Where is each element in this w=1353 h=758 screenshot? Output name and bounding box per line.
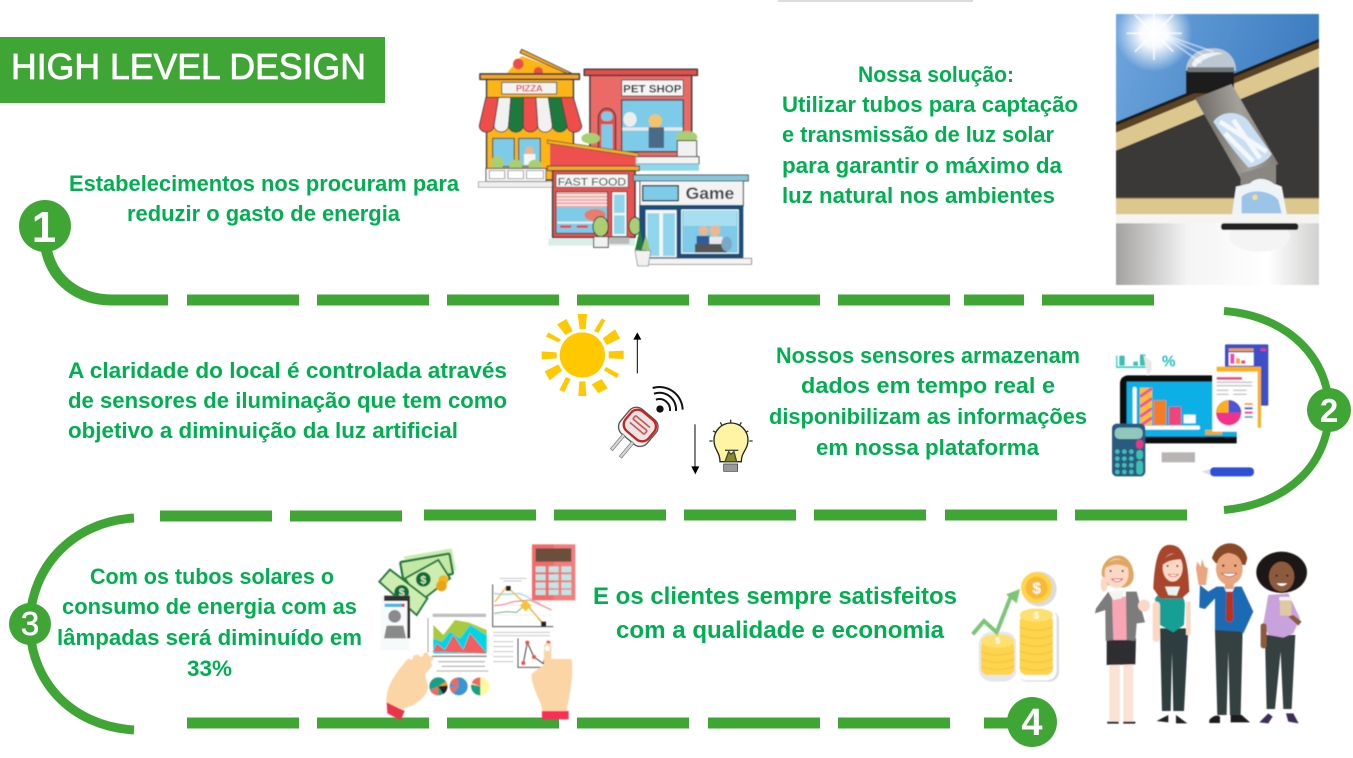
badge: number 1: [19, 200, 71, 252]
badge: number 3: [9, 603, 51, 645]
calculator: [1112, 424, 1145, 476]
man waving: [1196, 543, 1253, 723]
text: energy reduction: [57, 564, 362, 681]
text: energy reduction: consumo de energia com as: [62, 594, 357, 619]
text: sensors store data: dados em tempo real e: [801, 373, 1055, 398]
phone with profile: [381, 596, 410, 651]
text: sensors store data: [769, 343, 1087, 460]
icon: money, charts and hands: [379, 548, 572, 720]
orange folder: [1217, 367, 1261, 428]
banknotes: $: [420, 574, 426, 586]
path: step 1 line: [46, 248, 1154, 300]
right hand: [531, 643, 572, 719]
image: solar tube skylight: [1116, 0, 1319, 285]
icon: dashboard with calculator: %: [1162, 354, 1176, 371]
small chart: [518, 638, 550, 667]
text: satisfied clients: com a qualidade e economia: [616, 617, 945, 644]
light bulb: [709, 420, 753, 471]
woman in teal: [1153, 545, 1191, 723]
icon: coins growth: [973, 572, 1059, 682]
text: sensors control: A claridade do local é controlada através: [68, 358, 507, 383]
badge: number 4: 4: [1021, 702, 1043, 744]
game shop: [633, 175, 752, 266]
fast food: [547, 140, 641, 247]
people: satisfied clients: [1095, 543, 1307, 724]
text: establishments: reduzir o gasto de energia: [127, 201, 401, 226]
pizza shop: [478, 49, 582, 187]
text: satisfied clients: [593, 583, 957, 644]
fast food: FAST FOOD: [558, 176, 626, 188]
text: establishments: [69, 171, 460, 226]
growth arrow: [973, 594, 1012, 634]
text: energy reduction: lâmpadas será diminuído em: [57, 625, 362, 650]
title: HIGH LEVEL DESIGN: [11, 46, 366, 87]
banknotes: [379, 548, 456, 615]
icon: calculator pink: [532, 544, 575, 600]
text: establishments: Estabelecimentos nos procuram para: [69, 171, 460, 196]
text: satisfied clients: E os clientes sempre satisfeitos: [593, 583, 957, 610]
path: step 3 line: [30, 518, 1010, 730]
icon: sun, sensor and bulb: [542, 314, 753, 474]
light sensor: [603, 403, 662, 465]
text: our solution: e transmissão de luz solar: [782, 122, 1054, 147]
badge: number 3: 3: [21, 605, 39, 642]
text: sensors control: de sensores de iluminação que tem como: [68, 388, 507, 413]
path: step 2 line: [160, 311, 1329, 516]
icon: storefronts: [478, 49, 752, 266]
report page: [1212, 372, 1258, 432]
sticker shadow: [979, 632, 1017, 682]
banknotes: $: [399, 587, 405, 599]
text: sensors store data: Nossos sensores armazenam: [776, 343, 1080, 368]
text: energy reduction: Com os tubos solares o: [90, 564, 334, 589]
line chart: [493, 578, 553, 662]
game shop: Game: [686, 184, 734, 203]
blue document: [1225, 344, 1268, 406]
text: our solution: [782, 62, 1078, 208]
area chart: [428, 614, 488, 671]
text: sensors store data: disponibilizam as informações: [769, 404, 1087, 429]
text: our solution: Nossa solução:: [858, 62, 1014, 87]
blue marker: [1210, 467, 1254, 476]
arrows: [633, 332, 699, 474]
tall stack: $: [1034, 610, 1040, 620]
wifi waves: [653, 387, 683, 413]
text: sensors control: [68, 358, 507, 443]
sun: [542, 314, 624, 396]
badge: number 2: [1307, 388, 1351, 432]
text: sensors control: objetivo a diminuição da luz artificial: [68, 418, 458, 443]
badge: number 1: 1: [32, 203, 56, 252]
left hand: [386, 651, 436, 720]
text: our solution: para garantir o máximo da: [782, 153, 1063, 178]
badge: number 2: 2: [1320, 392, 1338, 429]
icon: dashboard with calculator: [1112, 344, 1268, 476]
pie charts: [429, 677, 489, 695]
badge: number 4: [1007, 697, 1057, 747]
coin: $: [1032, 580, 1041, 597]
pet shop: [581, 69, 699, 171]
text: our solution: luz natural nos ambientes: [782, 183, 1055, 208]
title: [0, 37, 385, 103]
text: energy reduction: 33%: [187, 656, 232, 681]
woman with coffee: [1256, 552, 1307, 723]
pet shop: PET SHOP: [623, 83, 682, 95]
text: our solution: Utilizar tubos para captação: [782, 92, 1078, 117]
woman with phone: [1095, 555, 1150, 724]
short stack: $: [995, 636, 1000, 646]
pizza shop: PIZZA: [516, 84, 543, 94]
text: sensors store data: em nossa plataforma: [816, 435, 1040, 460]
